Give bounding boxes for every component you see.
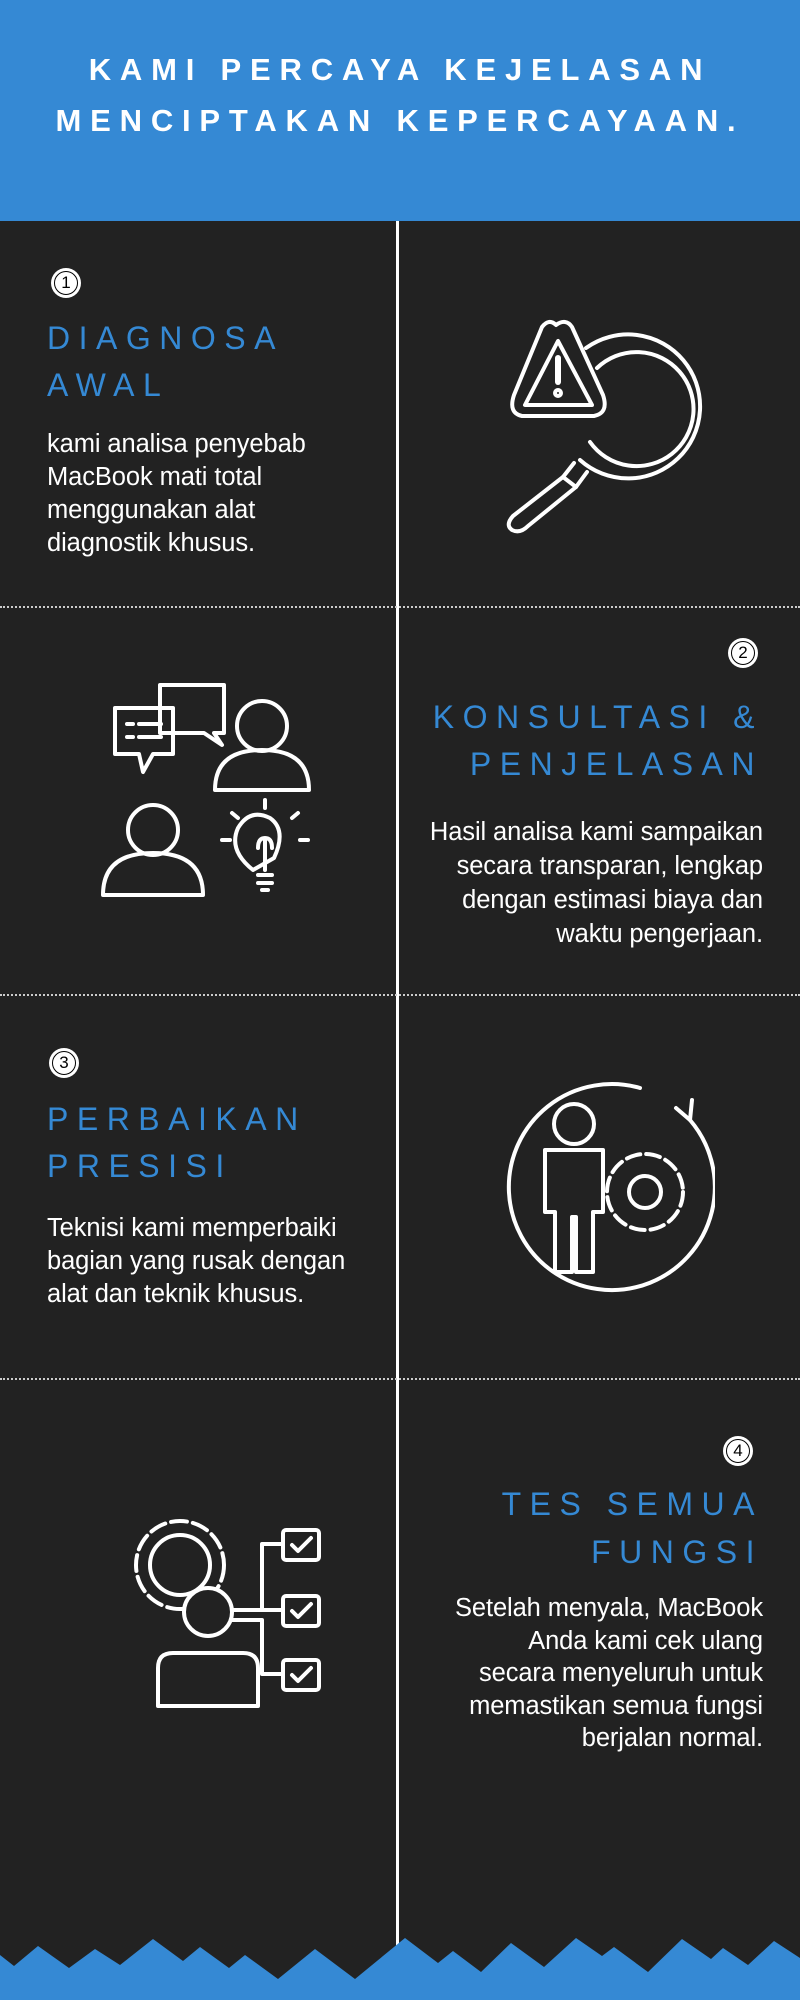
body 2: waktu pengerjaan. xyxy=(556,920,763,948)
body 2: secara transparan, lengkap xyxy=(457,852,763,880)
badge 3 xyxy=(49,1048,79,1078)
heading 4 xyxy=(502,1486,763,1570)
body 3: Teknisi kami memperbaiki xyxy=(47,1214,337,1242)
body 3 xyxy=(47,1214,345,1308)
badge 2 xyxy=(728,638,758,668)
body 4: Setelah menyala, MacBook xyxy=(455,1594,763,1622)
body 3: alat dan teknik khusus. xyxy=(47,1280,304,1308)
title xyxy=(56,52,744,138)
heading 2 xyxy=(433,699,763,782)
heading 3: PRESISI xyxy=(47,1148,233,1184)
title: MENCIPTAKAN KEPERCAYAAN. xyxy=(56,103,744,138)
body 3: bagian yang rusak dengan xyxy=(47,1247,345,1275)
body 1: diagnostik khusus. xyxy=(47,529,255,557)
heading 2: PENJELASAN xyxy=(470,746,763,782)
bottom wave xyxy=(0,1938,800,2000)
heading 1: AWAL xyxy=(47,367,169,403)
badge 1: 1 xyxy=(61,273,71,292)
badge 4: 4 xyxy=(733,1441,743,1460)
body 2: Hasil analisa kami sampaikan xyxy=(430,818,763,846)
body 1: MacBook mati total xyxy=(47,463,262,491)
header xyxy=(0,0,800,221)
icon: checklist xyxy=(134,1519,321,1708)
body 1: kami analisa penyebab xyxy=(47,430,306,458)
body 1 xyxy=(47,430,306,557)
body 4: Anda kami cek ulang xyxy=(528,1626,763,1654)
heading 3: PERBAIKAN xyxy=(47,1101,307,1137)
icon: technician gear xyxy=(506,1082,715,1292)
heading 1 xyxy=(47,320,284,403)
icon: magnifier warning xyxy=(506,320,702,534)
badge 1 xyxy=(51,268,81,298)
badge 4 xyxy=(723,1436,753,1466)
heading 3 xyxy=(47,1101,307,1184)
body 1: menggunakan alat xyxy=(47,496,255,524)
badge 2: 2 xyxy=(738,643,748,662)
heading 1: DIAGNOSA xyxy=(47,320,284,356)
body 4: secara menyeluruh untuk xyxy=(479,1659,763,1687)
heading 4: TES SEMUA xyxy=(502,1486,763,1522)
body 2 xyxy=(430,818,763,948)
body 4: memastikan semua fungsi xyxy=(469,1692,763,1720)
title: KAMI PERCAYA KEJELASAN xyxy=(89,52,711,87)
heading 2: KONSULTASI & xyxy=(433,699,763,735)
heading 4: FUNGSI xyxy=(591,1534,763,1570)
icon: consultation xyxy=(101,683,311,897)
body 4: berjalan normal. xyxy=(582,1724,763,1752)
body 2: dengan estimasi biaya dan xyxy=(462,886,763,914)
body 4 xyxy=(455,1594,764,1752)
badge 3: 3 xyxy=(59,1053,69,1072)
